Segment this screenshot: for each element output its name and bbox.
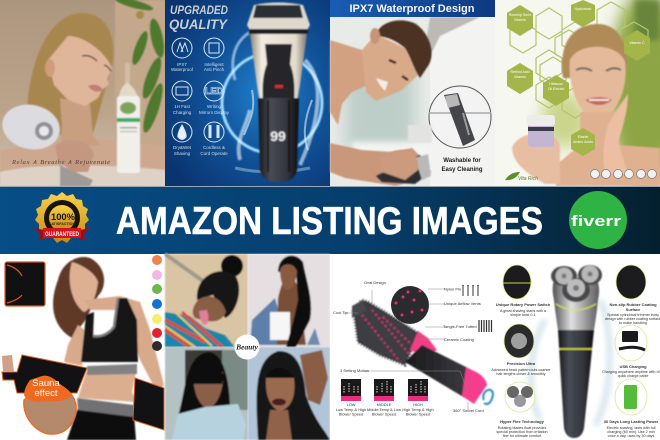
shaver in hand <box>376 150 431 184</box>
slogan: Relax ∧ Breathe ∧ Rejuvenate <box>11 159 110 166</box>
panel: waist trimmer <box>0 254 165 440</box>
fiverr logo <box>569 191 627 249</box>
photo: woman in denim jacket <box>248 254 330 347</box>
waist belt wraps <box>2 355 164 430</box>
hexagon labels: Vitamin <box>514 18 526 22</box>
feature captions: Surface <box>626 307 641 312</box>
hexagon labels <box>509 7 645 144</box>
feature labels: Writing <box>207 104 221 109</box>
photo: woman with dark lipstick <box>248 347 330 440</box>
feature captions: Rotating blades float provides <box>498 426 546 430</box>
feature captions: Special cylindrical trimmer body <box>607 313 659 317</box>
feature captions: hair lengths closer & smoothly <box>496 372 546 376</box>
hexagon labels: Amino Acids <box>573 140 593 144</box>
feature labels: Cord Operate <box>200 151 228 156</box>
feature icons: LED <box>205 86 224 96</box>
rotary shaver <box>551 265 602 438</box>
photo: woman in light blue tee <box>165 347 248 440</box>
eucalyptus leaves <box>114 0 167 135</box>
feature labels: Intelligent <box>204 62 224 67</box>
black and silver shaver: 99 <box>270 128 286 144</box>
washable inset circle <box>429 86 491 173</box>
feature captions: fine for ultimate comfort <box>503 434 541 438</box>
panel: skincare cream with honeycomb <box>495 0 660 190</box>
sauna effect callout: effect <box>34 388 58 399</box>
feature captions: Unique Rotary Power Switch <box>496 302 551 307</box>
setting labels: Middle Temp & Low <box>367 407 401 412</box>
setting labels <box>336 402 434 416</box>
feature captions: Electric shaving, lasts with full <box>607 426 656 430</box>
honeycomb lines <box>510 2 648 118</box>
brand logo: Vita Rich <box>518 176 538 182</box>
feature icons <box>172 38 224 142</box>
colour swatches <box>152 255 162 351</box>
heading <box>169 5 229 32</box>
panel: rotary shaver features <box>491 254 660 440</box>
feature captions: Non-slip Rubber Coating <box>609 302 657 307</box>
detail circles <box>503 265 647 415</box>
feature labels: Waterproof <box>171 67 194 72</box>
setting labels: Blower Speed <box>339 412 363 416</box>
brush labels: Unique Airflow Vents <box>444 301 481 306</box>
brush <box>352 300 493 404</box>
feature captions: charging (60 min). Use 2 min <box>607 430 655 434</box>
feature captions: Precision Ultra <box>507 361 536 366</box>
inset caption <box>441 158 483 173</box>
feature captions: design with rubber coating surface <box>605 317 660 321</box>
setting labels: Blower Speed <box>372 412 396 416</box>
detail circle <box>391 286 429 324</box>
black and silver shaver <box>247 2 310 182</box>
brush labels: Cool Tip <box>333 310 348 315</box>
panel: shower mist product photo <box>0 0 167 186</box>
callout lines <box>345 289 468 410</box>
hexagon labels: Hyaluronic <box>575 7 592 11</box>
brush labels: 360° Swivel Cord <box>453 408 484 413</box>
brush labels: Oval Design <box>364 280 386 285</box>
panel: upgraded quality shaver <box>165 0 330 186</box>
feature labels: Cordless & <box>203 145 225 150</box>
shower head <box>0 99 94 186</box>
hexagon labels: Elastin <box>578 135 588 139</box>
setting labels: LOW <box>347 402 356 407</box>
header bar <box>330 0 495 17</box>
feature captions: quick charge cable <box>618 374 648 378</box>
hexagon labels: Rosehip Seed <box>509 13 531 17</box>
feature captions: 30 Days Long Lasting Power <box>604 419 659 424</box>
hexagon labels: Vitamin <box>514 75 526 79</box>
brush labels: Nylon Pin <box>444 286 461 292</box>
smiling woman <box>512 24 660 186</box>
inset caption: Washable for <box>443 158 481 164</box>
feature labels: 1H Fast <box>174 104 191 109</box>
feature captions: simple twist 0-1 <box>510 313 536 317</box>
cream jar <box>527 115 555 147</box>
feature labels: Mirrors Display <box>199 110 230 115</box>
hexagon labels: Retinol Acid <box>511 70 529 74</box>
setting labels: High Temp & High <box>402 407 434 412</box>
brush labels: Ceramic Coating <box>444 337 474 342</box>
heading: UPGRADED <box>170 5 228 17</box>
brand logo <box>505 172 538 182</box>
serum bottle <box>117 63 140 173</box>
woman with wet blonde hair <box>0 13 165 186</box>
panel: IPX7 waterproof design <box>330 0 495 187</box>
feature captions: to make handling <box>619 321 647 325</box>
setting panels <box>341 379 428 401</box>
setting labels: MIDDLE <box>377 402 392 407</box>
guarantee badge: SATISFACTION <box>49 222 75 226</box>
feature labels: Dry&Wet <box>173 145 192 150</box>
feature labels: Shaving <box>174 151 191 156</box>
guarantee badge <box>34 192 90 243</box>
feature labels: IPX7 <box>177 62 187 67</box>
header bar: IPX7 Waterproof Design <box>350 3 475 15</box>
panel: beauty wigs photo grid <box>165 254 330 440</box>
sauna effect callout <box>24 376 76 434</box>
certification badges <box>590 170 656 178</box>
panel: hot air brush <box>330 254 495 440</box>
brush labels: 3 Setting Motion <box>340 368 369 373</box>
feature captions: special protection from irritation <box>496 430 548 434</box>
feature labels: Anti Pinch <box>204 67 225 72</box>
inset caption: Easy Cleaning <box>441 167 483 173</box>
hexagon labels: Hibiscus <box>549 82 563 86</box>
setting labels: HIGH <box>413 402 423 407</box>
woman in sports top <box>53 257 164 440</box>
feature labels: Charging <box>173 110 192 115</box>
belt product <box>5 262 45 306</box>
feature captions: USB Charging <box>619 364 647 369</box>
feature captions <box>491 302 660 438</box>
title: AMAZON LISTING IMAGES <box>116 200 543 243</box>
feature captions: Advanced head pattern cuts coarser <box>491 368 551 372</box>
beauty badge <box>234 334 260 360</box>
setting labels: Blower Speed <box>406 412 430 416</box>
heading: QUALITY <box>169 17 229 32</box>
hexagon labels: Oil Extract <box>548 87 564 91</box>
setting labels: Low Temp & High <box>336 407 366 412</box>
water ring <box>222 28 322 172</box>
fiverr logo: fiverr <box>571 213 621 230</box>
guarantee badge: 100% <box>51 212 75 222</box>
smiling man <box>330 20 432 186</box>
pin and bristle icons <box>463 285 492 332</box>
brush labels: Tangle-Free Tufted <box>443 324 477 329</box>
filled hexagons <box>507 0 650 156</box>
hexagon labels: Vitamin C <box>629 41 645 45</box>
brush labels <box>333 280 484 413</box>
beauty badge: Beauty <box>235 342 259 352</box>
feature captions: A great shaving starts with a <box>500 309 547 313</box>
feature captions: once a day, used by 30 days <box>608 434 654 438</box>
water splash <box>531 300 610 425</box>
banner <box>0 186 660 254</box>
guarantee badge: GUARANTEED <box>45 231 79 238</box>
feature labels <box>171 62 230 156</box>
sauna effect callout: Sauna <box>32 378 60 389</box>
photo: laughing woman in striped top <box>165 254 248 347</box>
feature captions: Hyper Flex Technology <box>500 419 545 424</box>
